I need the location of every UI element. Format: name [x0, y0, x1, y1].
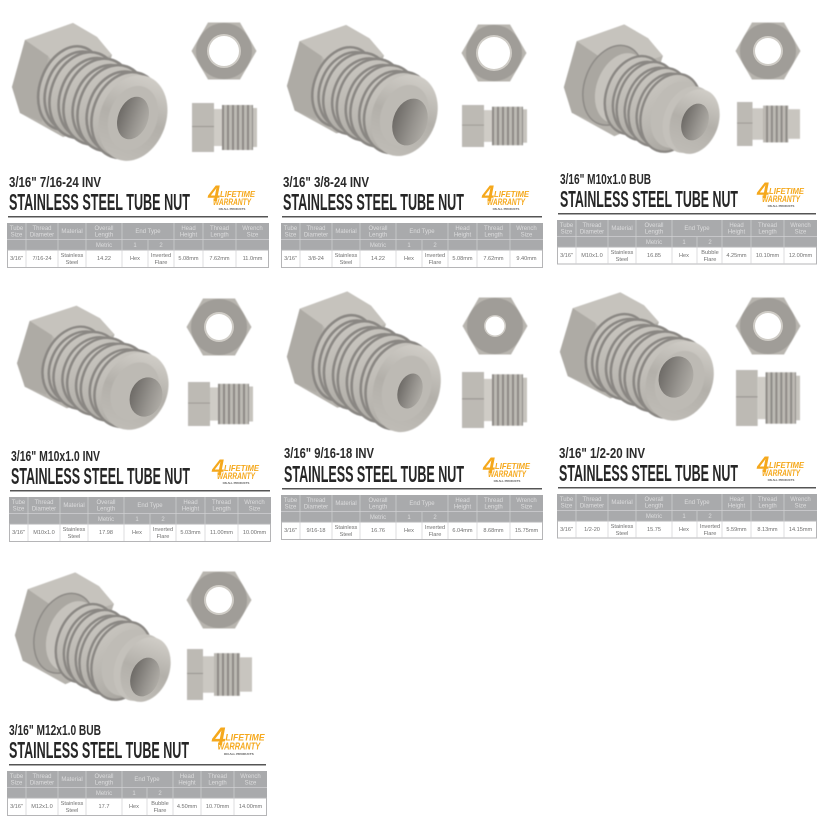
spec table: Metric — [370, 243, 386, 249]
warranty badge — [211, 724, 265, 756]
warranty badge — [211, 455, 259, 485]
spec table: Thread — [32, 226, 52, 232]
spec table: Stainless — [335, 253, 358, 259]
spec table: 1 — [682, 514, 686, 520]
panel: M10x1.0 BUB tube nut — [557, 22, 817, 264]
spec table: Stainless — [61, 253, 84, 259]
spec table: Wrench — [790, 497, 811, 503]
spec table: 2 — [161, 517, 165, 523]
warranty badge — [481, 181, 529, 211]
spec table: 16.85 — [647, 253, 661, 259]
spec table: Thread — [32, 774, 52, 780]
spec table: Length — [95, 232, 113, 238]
spec table: Metric — [646, 240, 662, 246]
warranty badge: LIFETIME — [494, 189, 529, 199]
warranty badge — [207, 181, 255, 211]
warranty badge: WARRANTY — [762, 194, 801, 204]
spec table — [281, 223, 543, 268]
photo: large nut — [287, 25, 449, 165]
spec table: Steel — [66, 260, 78, 266]
spec table: 2 — [158, 791, 162, 797]
warranty badge — [756, 178, 804, 208]
warranty badge: ON ALL PRODUCTS — [768, 478, 794, 482]
spec table: Bubble — [151, 801, 169, 807]
spec table: 3/16" — [560, 527, 573, 533]
warranty badge — [756, 452, 804, 482]
heading: size: 3/16" 7/16-24 INV — [9, 174, 101, 191]
spec table: Material — [335, 501, 357, 507]
spec table: Wrench — [790, 223, 811, 229]
warranty badge: 4 — [756, 178, 769, 203]
spec table: 10.00mm — [243, 530, 266, 536]
spec table: Wrench — [240, 774, 261, 780]
photo: large nut — [560, 292, 725, 430]
spec table: 8.13mm — [757, 527, 778, 533]
spec table: 14.00mm — [239, 804, 262, 810]
spec table: Size — [249, 506, 261, 512]
panel: 3/8-24 INV tube nut — [281, 24, 543, 268]
heading: size: 3/16" 9/16-18 INV — [284, 445, 374, 462]
spec table: Hex — [404, 256, 414, 262]
spec table: 3/16" — [10, 804, 23, 810]
spec table: Height — [454, 504, 472, 510]
spec table: Steel — [616, 531, 628, 537]
heading: product name: STAINLESS STEEL TUBE NUT — [283, 189, 464, 215]
photo: large nut — [287, 291, 452, 442]
spec table: Length — [210, 232, 229, 238]
spec table: Tube — [10, 774, 24, 780]
spec table: Size — [561, 230, 573, 236]
spec table: Hex — [129, 804, 139, 810]
spec table: Diameter — [30, 232, 54, 238]
spec table: 1 — [407, 243, 411, 249]
heading: size: 3/16" M10x1.0 BUB — [560, 171, 651, 188]
spec table: 3/16" — [12, 530, 25, 536]
spec table: 2 — [708, 240, 712, 246]
spec table — [557, 220, 817, 264]
spec table: Metric — [98, 517, 114, 523]
spec table: Inverted — [153, 527, 173, 533]
spec table: 15.75 — [647, 527, 661, 533]
spec table: Thread — [582, 497, 602, 503]
spec table: 5.03mm — [180, 530, 201, 536]
heading: product name: STAINLESS STEEL TUBE NUT — [9, 737, 189, 763]
spec table: Head — [729, 497, 744, 503]
warranty badge: ON ALL PRODUCTS — [223, 481, 249, 485]
spec table: Diameter — [32, 506, 56, 512]
spec table: Material — [335, 229, 357, 235]
heading: product name: STAINLESS STEEL TUBE NUT — [9, 189, 190, 215]
spec table — [9, 497, 271, 542]
spec table: Steel — [66, 808, 78, 814]
spec table: End Type — [409, 229, 435, 235]
photo: nut side view — [187, 649, 252, 700]
spec table: Steel — [340, 532, 352, 538]
spec table: 11.0mm — [243, 256, 263, 262]
spec table: Thread — [210, 226, 229, 232]
spec table: Length — [484, 232, 503, 238]
warranty badge: LIFETIME — [495, 461, 530, 471]
spec table: Length — [645, 504, 663, 510]
spec table: 2 — [708, 514, 712, 520]
spec table: End Type — [134, 777, 160, 783]
photo: nut front view — [736, 298, 800, 354]
spec table: 17.7 — [99, 804, 109, 810]
spec table: Steel — [616, 257, 628, 263]
spec table: M10x1.0 — [33, 530, 55, 536]
spec table: 3/16" — [10, 256, 23, 262]
spec table: End Type — [135, 229, 161, 235]
spec table: 9.40mm — [516, 256, 537, 262]
spec table: Length — [645, 230, 663, 236]
spec table: Length — [95, 780, 113, 786]
spec table: Stainless — [335, 525, 358, 531]
spec table: Diameter — [304, 504, 328, 510]
spec table: Height — [454, 232, 472, 238]
spec table: 1 — [682, 240, 686, 246]
warranty badge: LIFETIME — [225, 733, 265, 744]
spec table: Flare — [429, 260, 441, 266]
spec table: 10.10mm — [756, 253, 779, 259]
spec table: Height — [182, 506, 200, 512]
spec table: Stainless — [611, 524, 634, 530]
spec table: Thread — [484, 226, 503, 232]
spec table: 5.59mm — [726, 527, 747, 533]
spec table: Size — [285, 504, 297, 510]
spec table: 1 — [132, 791, 136, 797]
spec table: Flare — [704, 257, 716, 263]
warranty badge: WARRANTY — [488, 469, 527, 479]
spec table: Size — [521, 504, 533, 510]
spec table: Metric — [96, 243, 112, 249]
spec table: Inverted — [700, 524, 720, 530]
photo: nut front view — [192, 22, 256, 80]
spec table: Thread — [582, 223, 602, 229]
photo: nut front view — [186, 572, 252, 628]
spec table: 3/8-24 — [308, 256, 324, 262]
heading: size: 3/16" 1/2-20 INV — [559, 445, 645, 462]
warranty badge: WARRANTY — [762, 468, 801, 478]
spec table: Length — [208, 780, 227, 786]
spec table: 16.76 — [371, 528, 385, 534]
spec table: Material — [611, 226, 633, 232]
spec table: Wrench — [242, 226, 263, 232]
warranty badge: 4 — [211, 724, 226, 751]
spec table — [557, 494, 817, 538]
warranty badge: LIFETIME — [769, 186, 804, 196]
spec table — [281, 495, 543, 540]
spec table: Hex — [404, 528, 414, 534]
spec table: Length — [484, 504, 503, 510]
spec table: Height — [728, 230, 746, 236]
spec table: Length — [212, 506, 231, 512]
spec table: 11.00mm — [210, 530, 233, 536]
spec table: Stainless — [611, 250, 634, 256]
spec table: 3/16" — [284, 256, 297, 262]
spec table: Tube — [560, 497, 574, 503]
photo: nut side view — [737, 102, 800, 146]
spec table: Overall — [368, 226, 388, 232]
photo: large nut — [15, 573, 179, 709]
spec table: Diameter — [30, 780, 54, 786]
spec table: Head — [183, 500, 198, 506]
photo: large nut — [564, 25, 728, 161]
photo: nut front view — [462, 24, 526, 82]
photo: nut side view — [462, 105, 527, 147]
spec table: Thread — [306, 498, 326, 504]
spec table: Metric — [96, 791, 112, 797]
panel: M10x1.0 INV tube nut — [9, 298, 271, 542]
spec table: Length — [97, 506, 115, 512]
photo: nut side view — [736, 370, 800, 426]
heading: size: 3/16" 3/8-24 INV — [283, 174, 369, 191]
spec table: Overall — [368, 498, 388, 504]
photo: nut front view — [736, 22, 800, 80]
spec table: 3/16" — [284, 528, 297, 534]
heading: size: 3/16" M12x1.0 BUB — [9, 722, 101, 739]
spec table: Size — [11, 232, 23, 238]
spec table: Material — [61, 777, 83, 783]
spec table: 5.08mm — [178, 256, 199, 262]
heading: size: 3/16" M10x1.0 INV — [11, 448, 100, 465]
spec table: Diameter — [304, 232, 328, 238]
spec table: Size — [245, 780, 257, 786]
spec table: Overall — [94, 226, 114, 232]
spec table: Bubble — [701, 250, 719, 256]
spec table: Stainless — [61, 801, 84, 807]
heading: product name: STAINLESS STEEL TUBE NUT — [284, 461, 464, 487]
spec table: Overall — [644, 497, 664, 503]
spec table: Flare — [155, 260, 167, 266]
spec table: Material — [611, 500, 633, 506]
spec table: Metric — [370, 515, 386, 521]
spec table: Size — [11, 780, 23, 786]
spec table: 14.22 — [97, 256, 111, 262]
spec table: Material — [63, 503, 85, 509]
spec table: 1 — [407, 515, 411, 521]
spec table: Thread — [306, 226, 326, 232]
spec table: 5.08mm — [452, 256, 473, 262]
spec table: Flare — [429, 532, 441, 538]
spec table: 15.75mm — [515, 528, 538, 534]
warranty badge: ON ALL PRODUCTS — [494, 479, 520, 483]
spec table: Size — [521, 232, 533, 238]
spec table: 7/16-24 — [33, 256, 51, 262]
spec table: 7.62mm — [209, 256, 230, 262]
spec table: Head — [455, 498, 470, 504]
spec table: Thread — [484, 498, 503, 504]
spec table: Head — [729, 223, 744, 229]
spec table: Length — [369, 232, 387, 238]
spec table: Hex — [679, 253, 689, 259]
spec table: 14.15mm — [789, 527, 812, 533]
spec table: End Type — [684, 500, 710, 506]
spec table: Tube — [284, 498, 298, 504]
spec table: Size — [561, 504, 573, 510]
spec table: Flare — [157, 534, 169, 540]
photo: nut front view — [462, 298, 528, 354]
photo: nut side view — [188, 382, 253, 426]
spec table: 1 — [133, 243, 137, 249]
spec table: Head — [455, 226, 470, 232]
spec table: 17.98 — [99, 530, 113, 536]
spec table: M12x1.0 — [31, 804, 53, 810]
warranty badge: ON ALL PRODUCTS — [768, 204, 794, 208]
spec table: Inverted — [425, 525, 445, 531]
spec table: Steel — [340, 260, 352, 266]
spec table: 9/16-18 — [307, 528, 325, 534]
spec table: Height — [728, 504, 746, 510]
warranty badge: 4 — [481, 181, 494, 206]
warranty badge: WARRANTY — [218, 742, 261, 753]
spec table: End Type — [137, 503, 163, 509]
spec table: Overall — [644, 223, 664, 229]
spec table — [7, 771, 267, 816]
panel: 7/16-24 INV tube nut — [7, 22, 269, 268]
spec table: Hex — [132, 530, 142, 536]
warranty badge: ON ALL PRODUCTS — [219, 207, 245, 211]
spec table: Thread — [758, 223, 777, 229]
warranty badge: WARRANTY — [213, 197, 252, 207]
spec table: 1 — [135, 517, 139, 523]
spec table: Size — [795, 504, 807, 510]
spec table: 8.68mm — [483, 528, 504, 534]
spec table: Stainless — [63, 527, 86, 533]
photo: nut side view — [462, 372, 527, 428]
spec table: Inverted — [151, 253, 171, 259]
spec table: Head — [181, 226, 196, 232]
warranty badge: 4 — [211, 455, 224, 480]
warranty badge: LIFETIME — [220, 189, 255, 199]
spec table: Metric — [646, 514, 662, 520]
photo: nut side view — [192, 103, 257, 152]
spec table: Length — [758, 230, 777, 236]
spec table: 2 — [433, 243, 437, 249]
spec table: Overall — [96, 500, 116, 506]
spec table: 6.04mm — [452, 528, 473, 534]
spec table: Inverted — [425, 253, 445, 259]
spec table: Thread — [208, 774, 227, 780]
spec table: 4.50mm — [177, 804, 197, 810]
spec table: Size — [795, 230, 807, 236]
spec table: Length — [369, 504, 387, 510]
spec table: End Type — [684, 226, 710, 232]
spec table: Tube — [284, 226, 298, 232]
spec table: 2 — [433, 515, 437, 521]
spec table: Thread — [212, 500, 231, 506]
spec table: Tube — [10, 226, 24, 232]
spec table: Steel — [68, 534, 80, 540]
warranty badge: 4 — [756, 452, 769, 477]
spec table: Hex — [130, 256, 140, 262]
spec table: Material — [61, 229, 83, 235]
spec table: Tube — [12, 500, 26, 506]
spec table: 10.70mm — [206, 804, 229, 810]
spec table: Flare — [154, 808, 166, 814]
warranty badge: WARRANTY — [487, 197, 526, 207]
spec table: Size — [13, 506, 25, 512]
panel: M12x1.0 BUB tube nut — [7, 572, 267, 816]
spec table: Wrench — [516, 498, 537, 504]
spec table: Overall — [94, 774, 114, 780]
spec table: Size — [285, 232, 297, 238]
spec table: Height — [178, 780, 196, 786]
heading: product name: STAINLESS STEEL TUBE NUT — [11, 463, 190, 489]
warranty badge: WARRANTY — [217, 471, 256, 481]
spec table: Hex — [679, 527, 689, 533]
spec table: End Type — [409, 501, 435, 507]
spec table: Size — [247, 232, 259, 238]
warranty badge: ON ALL PRODUCTS — [224, 752, 254, 756]
spec table: Tube — [560, 223, 574, 229]
panel: 9/16-18 INV tube nut — [281, 291, 543, 540]
spec table: Length — [758, 504, 777, 510]
warranty badge: 4 — [482, 453, 495, 478]
spec table: Thread — [34, 500, 54, 506]
spec table: Head — [180, 774, 194, 780]
spec table: 4.25mm — [726, 253, 747, 259]
spec table: 2 — [159, 243, 163, 249]
spec table: Diameter — [580, 504, 604, 510]
spec table: 1/2-20 — [584, 527, 600, 533]
spec table: Flare — [704, 531, 716, 537]
spec table: Thread — [758, 497, 777, 503]
warranty badge — [482, 453, 530, 483]
spec table: 12.00mm — [789, 253, 812, 259]
spec table: 14.22 — [371, 256, 385, 262]
warranty badge: 4 — [207, 181, 220, 206]
spec table: 7.62mm — [483, 256, 504, 262]
spec table: Diameter — [580, 230, 604, 236]
photo: large nut — [12, 23, 179, 171]
panel: 1/2-20 INV tube nut — [557, 292, 817, 538]
warranty badge: ON ALL PRODUCTS — [493, 207, 519, 211]
warranty badge: LIFETIME — [224, 463, 259, 473]
spec table: Wrench — [516, 226, 537, 232]
photo: large nut — [17, 306, 180, 439]
spec table — [7, 223, 269, 268]
spec table: Height — [180, 232, 198, 238]
warranty badge: LIFETIME — [769, 460, 804, 470]
spec table: Wrench — [244, 500, 265, 506]
spec table: M10x1.0 — [581, 253, 603, 259]
spec table: 3/16" — [560, 253, 573, 259]
photo: nut front view — [186, 298, 252, 356]
